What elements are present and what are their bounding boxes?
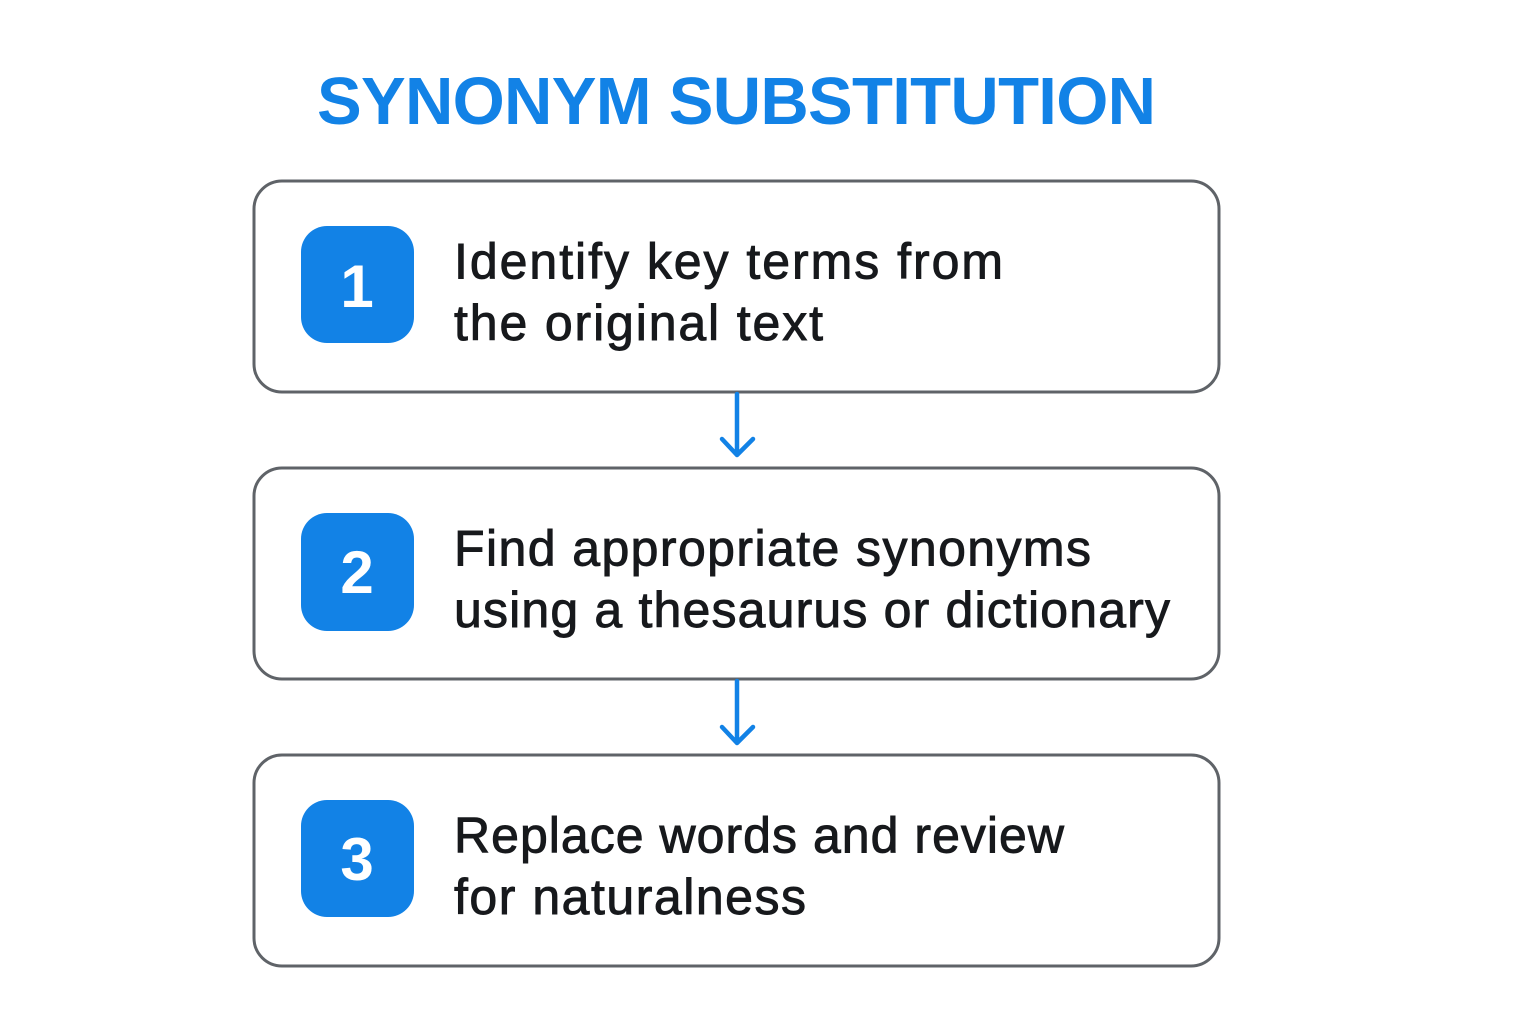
badge: step 3 <box>301 800 414 917</box>
text: step 1: the original text <box>454 295 823 351</box>
title: SYNONYM SUBSTITUTION <box>317 64 1156 139</box>
arrow: step 2 to step 3 <box>722 681 753 743</box>
badge: step 1: 1 <box>340 253 374 320</box>
text: step 1 <box>454 234 1003 351</box>
text: step 2 <box>454 520 1170 638</box>
text: step 1: Identify key terms from <box>454 234 1003 290</box>
text: step 2: using a thesaurus or dictionary <box>454 582 1170 638</box>
badge: step 2 <box>301 513 414 631</box>
text: step 3: Replace words and review <box>454 808 1065 864</box>
text: step 3: for naturalness <box>454 869 806 925</box>
panel: step 1 <box>254 181 1219 392</box>
badge: step 2: 2 <box>340 539 374 606</box>
panel: step 2 <box>254 468 1219 679</box>
text: step 2: Find appropriate synonyms <box>454 520 1091 576</box>
badge: step 1 <box>301 226 414 343</box>
text: step 3 <box>454 808 1065 925</box>
panel: step 3 <box>254 755 1219 966</box>
arrow: step 1 to step 2 <box>722 394 753 455</box>
badge: step 3: 3 <box>340 826 374 893</box>
